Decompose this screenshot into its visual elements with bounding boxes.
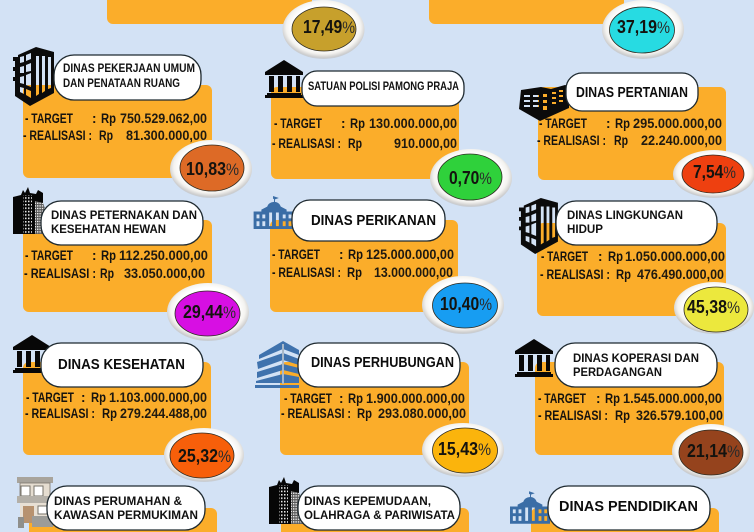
realisasi row: 279.244.488,00 <box>120 406 207 421</box>
bubble: 25,32%: 25,32% <box>178 446 231 466</box>
realisasi row <box>537 133 722 148</box>
bubble: 45,38% <box>674 282 754 334</box>
heading pill <box>54 55 201 100</box>
panel: Dinas Perhubungan <box>255 341 504 477</box>
realisasi row: - REALISASI : <box>23 128 92 143</box>
bubble: 15,43%: 15,43% <box>438 439 491 459</box>
heading pill <box>566 73 698 111</box>
target row: - TARGET <box>541 249 589 264</box>
realisasi row: Rp <box>357 406 372 421</box>
bubble: 17,49% <box>282 0 364 59</box>
bubble: 37,19% <box>602 0 684 59</box>
realisasi row: - REALISASI : <box>281 406 351 421</box>
bubble: 10,83% <box>170 140 252 198</box>
target row: 295.000.000,00 <box>633 116 722 131</box>
panel: Dinas Koperasi <box>515 339 750 479</box>
target row <box>274 116 457 131</box>
realisasi row <box>25 406 207 421</box>
icon: skyscrapers <box>269 477 307 524</box>
icon: skyscrapers <box>13 187 51 234</box>
target row <box>284 391 465 406</box>
realisasi row: 910.000,00 <box>394 136 457 151</box>
realisasi row: 13.000.000,00 <box>374 265 453 280</box>
target row <box>538 391 722 406</box>
bubble: 17,49%: 17,49% <box>303 17 355 37</box>
icon: blue office <box>255 341 299 388</box>
realisasi row <box>538 408 723 423</box>
heading pill <box>556 201 717 245</box>
bubble: 29,44%: 29,44% <box>183 302 236 322</box>
bubble: 37,19%: 37,19% <box>617 17 670 37</box>
target row: - TARGET <box>538 391 587 406</box>
heading pill: DINAS PERHUBUNGAN <box>311 355 454 371</box>
realisasi row <box>23 128 207 143</box>
realisasi row <box>281 406 466 421</box>
target row: - TARGET <box>272 247 321 262</box>
icon: hotel building <box>519 85 569 121</box>
icon: office building <box>519 198 558 254</box>
target row: 1.050.000.000,00 <box>625 249 725 264</box>
heading pill: OLAHRAGA & PARIWISATA <box>304 510 455 522</box>
target row: : <box>92 248 96 263</box>
realisasi row: - REALISASI : <box>272 136 341 151</box>
target row: : <box>81 390 86 405</box>
realisasi row: 81.300.000,00 <box>126 128 207 143</box>
icon: temple <box>265 60 303 98</box>
heading pill <box>292 200 445 241</box>
panel: Dinas Perumahan <box>17 477 217 532</box>
heading pill: DINAS PERTANIAN <box>576 85 688 101</box>
target row <box>541 249 725 264</box>
target row: : <box>598 249 602 264</box>
realisasi row: Rp <box>100 266 114 281</box>
bubble: 45,38%: 45,38% <box>687 297 740 317</box>
realisasi row: Rp <box>102 406 117 421</box>
realisasi row: - REALISASI : <box>537 133 606 148</box>
target row: Rp <box>605 391 620 406</box>
icon: capitol <box>254 196 294 229</box>
target row: - TARGET <box>25 248 74 263</box>
heading pill <box>41 201 203 245</box>
heading pill: PERDAGANGAN <box>573 367 662 379</box>
target row: 125.000.000,00 <box>366 247 454 262</box>
bubble: 0,70%: 0,70% <box>449 168 492 188</box>
panel: Dinas Kesehatan <box>13 335 244 482</box>
heading pill: KAWASAN PERMUKIMAN <box>54 510 198 522</box>
icon: house <box>17 477 53 528</box>
target row: - TARGET <box>539 116 588 131</box>
realisasi row <box>24 266 205 281</box>
realisasi row: 22.240.000,00 <box>641 133 722 148</box>
bubble: 10,83%: 10,83% <box>186 159 239 179</box>
target row: Rp <box>608 249 623 264</box>
bubble: 7,54%: 7,54% <box>693 162 736 182</box>
realisasi row: Rp <box>99 128 113 143</box>
heading pill: DINAS PERIKANAN <box>311 213 436 229</box>
bubble: 15,43% <box>422 423 504 477</box>
target row <box>25 111 207 126</box>
icon: temple <box>13 335 51 373</box>
heading pill: DINAS PETERNAKAN DAN <box>51 210 197 222</box>
panel: Dinas Pekerjaan Umum <box>13 47 252 198</box>
realisasi row <box>272 265 453 280</box>
bubble: 10,40%: 10,40% <box>440 294 492 314</box>
heading pill: KESEHATAN HEWAN <box>51 224 166 236</box>
target row <box>26 390 207 405</box>
target row <box>539 116 722 131</box>
realisasi row: 293.080.000,00 <box>378 406 466 421</box>
realisasi row: - REALISASI : <box>538 408 608 423</box>
target row: : <box>339 247 344 262</box>
icon: capitol <box>510 491 550 524</box>
heading pill: DINAS KOPERASI DAN <box>573 353 699 365</box>
target row <box>272 247 454 262</box>
realisasi row: Rp <box>348 136 362 151</box>
panel: top left card fragment <box>107 0 364 59</box>
target row: - TARGET <box>25 111 74 126</box>
target row: - TARGET <box>284 391 333 406</box>
heading pill: HIDUP <box>567 224 603 236</box>
heading pill: DAN PENATAAN RUANG <box>63 78 180 90</box>
realisasi row: - REALISASI : <box>272 265 341 280</box>
panel: Satuan Polisi Pamong Praja <box>265 60 512 207</box>
realisasi row: Rp <box>614 133 628 148</box>
bubble: 7,54% <box>673 150 754 198</box>
target row: Rp <box>348 391 363 406</box>
target row: Rp <box>615 116 630 131</box>
heading pill: DINAS PEKERJAAN UMUM <box>63 63 195 75</box>
target row: 1.900.000.000,00 <box>366 391 465 406</box>
realisasi row <box>540 267 724 282</box>
heading pill: SATUAN POLISI PAMONG PRAJA <box>308 81 459 93</box>
target row: : <box>339 391 344 406</box>
target row: 1.103.000.000,00 <box>109 390 207 405</box>
bubble: 25,32% <box>164 428 244 482</box>
realisasi row <box>272 136 457 151</box>
target row: Rp <box>348 247 363 262</box>
heading pill <box>298 343 460 387</box>
target row: Rp <box>91 390 106 405</box>
heading pill <box>47 486 205 530</box>
target row: Rp <box>101 248 116 263</box>
icon: temple <box>515 339 553 377</box>
heading pill: DINAS PERUMAHAN & <box>54 496 182 508</box>
bubble: 29,44% <box>167 283 249 341</box>
realisasi row: Rp <box>347 265 362 280</box>
heading pill <box>298 486 460 530</box>
target row: 112.250.000,00 <box>119 248 208 263</box>
panel: Dinas Peternakan <box>13 187 249 341</box>
heading pill <box>302 71 464 106</box>
target row: : <box>596 391 600 406</box>
panel: Dinas Perikanan <box>254 196 504 334</box>
realisasi row: 326.579.100,00 <box>636 408 723 423</box>
panel: top right card fragment <box>429 0 684 59</box>
heading pill: DINAS KEPEMUDAAN, <box>304 496 431 508</box>
target row: - TARGET <box>274 116 323 131</box>
bubble: 10,40% <box>422 276 504 334</box>
realisasi row: Rp <box>615 408 630 423</box>
bubble: 21,14%: 21,14% <box>687 441 740 461</box>
target row: 130.000.000,00 <box>369 116 457 131</box>
realisasi row: 33.050.000,00 <box>124 266 205 281</box>
target row: Rp <box>101 111 116 126</box>
icon: office building <box>13 47 54 106</box>
target row: 1.545.000.000,00 <box>623 391 722 406</box>
target row: : <box>606 116 610 131</box>
heading pill: DINAS KESEHATAN <box>58 357 185 373</box>
panel: Dinas Pertanian <box>519 73 754 198</box>
heading pill: DINAS LINGKUNGAN <box>567 210 683 222</box>
heading pill <box>41 343 203 387</box>
target row <box>25 248 208 263</box>
bubble: 0,70% <box>430 149 512 207</box>
target row: - TARGET <box>26 390 75 405</box>
panel: Dinas Lingkungan Hidup <box>519 198 754 334</box>
bubble: 21,14% <box>672 424 750 479</box>
panel: Dinas Kepemudaan <box>269 477 469 532</box>
target row: : <box>341 116 346 131</box>
heading pill <box>555 343 717 387</box>
heading pill: DINAS PENDIDIKAN <box>559 499 698 515</box>
panel: Dinas Pendidikan <box>510 486 719 532</box>
realisasi row: - REALISASI : <box>24 266 96 281</box>
target row: Rp <box>350 116 365 131</box>
realisasi row: Rp <box>616 267 631 282</box>
realisasi row: 476.490.000,00 <box>637 267 724 282</box>
target row: : <box>92 111 96 126</box>
heading pill <box>548 486 710 530</box>
target row: 750.529.062,00 <box>120 111 207 126</box>
realisasi row: - REALISASI : <box>25 406 95 421</box>
realisasi row: - REALISASI : <box>540 267 610 282</box>
